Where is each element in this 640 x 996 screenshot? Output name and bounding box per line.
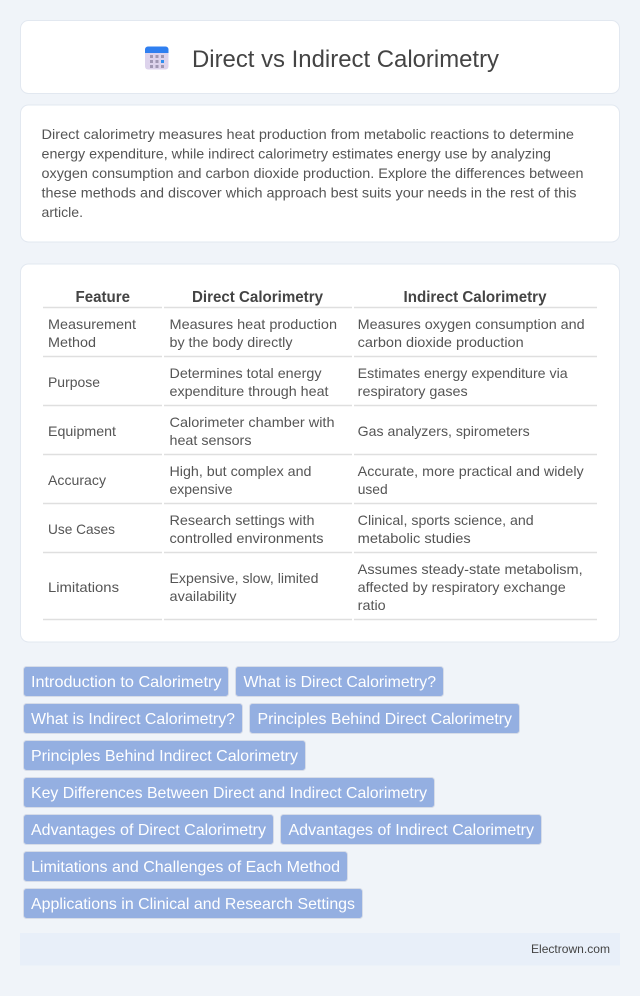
row: measurement method: by the body directly [170, 334, 292, 350]
row: equipment: heat sensors [170, 432, 252, 448]
row: use cases: Clinical, sports science, and [358, 512, 534, 528]
title: Direct vs Indirect Calorimetry [192, 46, 499, 73]
table header row: Direct Calorimetry [192, 289, 323, 306]
row: limitations: ratio [358, 597, 386, 613]
tag: advantages indirect: Advantages of Indirect Calorimetry [288, 822, 534, 839]
row: purpose: Determines total energy [170, 365, 322, 381]
tag: principles direct: Principles Behind Direct Calorimetry [258, 711, 512, 728]
tag: applications: Applications in Clinical and Research Settings [31, 896, 355, 913]
row: measurement method: Method [48, 334, 96, 350]
tag: principles direct [250, 704, 520, 734]
tag: introduction [24, 666, 228, 696]
row: accuracy: expensive [170, 481, 233, 497]
tag: key differences [24, 778, 434, 808]
tag: introduction: Introduction to Calorimetry [31, 674, 221, 691]
row: limitations: availability [170, 588, 236, 604]
row: purpose: Estimates energy expenditure via [358, 365, 568, 381]
row: equipment: Equipment [48, 423, 116, 439]
tag: principles indirect [24, 740, 306, 770]
footer source text: Electrown.com [531, 942, 610, 956]
tag: advantages direct: Advantages of Direct Calorimetry [31, 822, 266, 839]
row: accuracy: used [358, 481, 388, 497]
row: measurement method: Measures oxygen consumption and [358, 316, 585, 332]
row: limitations: Expensive, slow, limited [170, 570, 318, 586]
icon: calculator calendar [145, 46, 168, 70]
table header row: Indirect Calorimetry [404, 289, 547, 306]
table header row [76, 289, 547, 306]
row: accuracy [48, 463, 584, 497]
row: measurement method [48, 316, 585, 350]
tag: what is indirect: What is Indirect Calorimetry? [31, 711, 235, 728]
tag: applications [24, 888, 362, 918]
panel: comparison table [20, 264, 620, 642]
row: measurement method: Measurement [48, 316, 136, 332]
intro paragraph: oxygen consumption and carbon dioxide production. Explore the differences between [42, 165, 584, 181]
tag: key differences: Key Differences Between Direct and Indirect Calorimetry [31, 785, 427, 802]
row: limitations [48, 561, 583, 613]
tag: limitations [24, 852, 348, 882]
row: purpose: respiratory gases [358, 383, 468, 399]
table header row: Feature [76, 289, 130, 306]
intro paragraph: energy expenditure, while indirect calorimetry estimates energy use by analyzing [42, 146, 551, 162]
intro paragraph [42, 126, 584, 220]
row: measurement method: Measures heat production [170, 316, 337, 332]
row: purpose: Purpose [48, 374, 100, 390]
row: limitations: Assumes steady-state metabolism, [358, 561, 583, 577]
row: accuracy: Accuracy [48, 472, 106, 488]
row: use cases: metabolic studies [358, 530, 471, 546]
tag: principles indirect: Principles Behind Indirect Calorimetry [31, 748, 298, 765]
tag: what is indirect [24, 704, 242, 734]
row: limitations: affected by respiratory exchange [358, 579, 566, 595]
tag: advantages indirect [280, 814, 542, 844]
row: limitations: Limitations [48, 579, 119, 595]
row: use cases: Use Cases [48, 521, 115, 537]
row: use cases: controlled environments [170, 530, 324, 546]
row: equipment: Gas analyzers, spirometers [358, 423, 530, 439]
tag: what is direct: What is Direct Calorimetry? [244, 674, 436, 691]
intro paragraph: Direct calorimetry measures heat production from metabolic reactions to determine [42, 126, 574, 142]
footer [20, 933, 620, 966]
intro paragraph: these methods and discover which approach best suits your needs in the rest of this [42, 184, 576, 200]
row: accuracy: Accurate, more practical and widely [358, 463, 584, 479]
row: equipment: Calorimeter chamber with [170, 414, 334, 430]
panel: title card [20, 20, 620, 94]
intro paragraph: article. [42, 204, 83, 220]
row: purpose: expenditure through heat [170, 383, 329, 399]
panel: introduction text [20, 105, 620, 242]
tag: advantages direct [24, 814, 274, 844]
tag: limitations: Limitations and Challenges of Each Method [31, 859, 340, 876]
row: use cases: Research settings with [170, 512, 314, 528]
tag: what is direct [236, 666, 444, 696]
row: equipment [48, 414, 530, 448]
row: accuracy: High, but complex and [170, 463, 312, 479]
row: use cases [48, 512, 534, 546]
panel: topic link tags [24, 666, 542, 918]
row: measurement method: carbon dioxide production [358, 334, 524, 350]
row: purpose [48, 365, 568, 399]
